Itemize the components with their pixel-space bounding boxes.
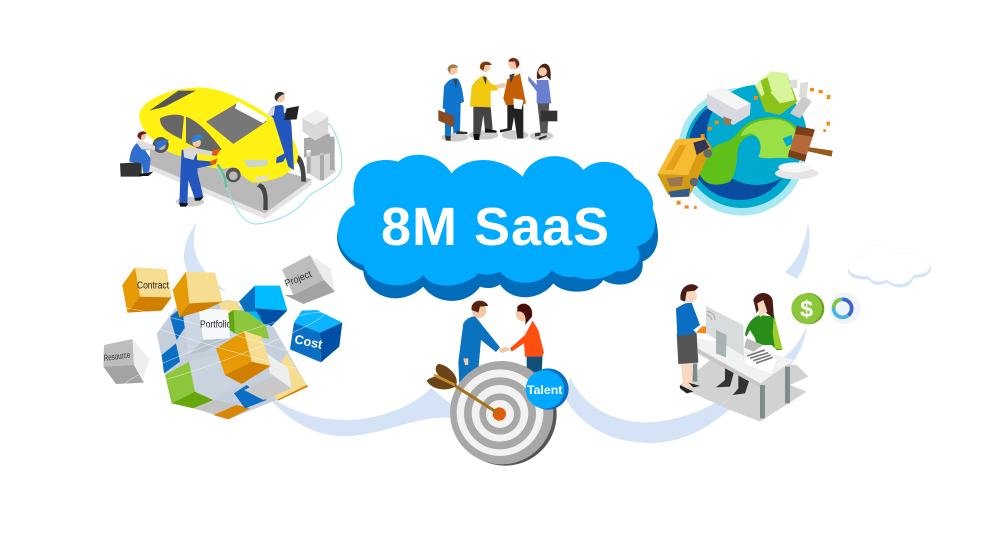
- cube: resource: Resource: [103, 350, 131, 363]
- orange cube top: [186, 272, 223, 303]
- cube: cost: Cost: [293, 332, 324, 352]
- cube: contract: Contract: [137, 280, 169, 291]
- small cloud: [848, 245, 931, 287]
- cloud face: [338, 155, 655, 286]
- arrow: [427, 364, 499, 414]
- icon: dollar: $: [800, 296, 813, 322]
- woman standing: [676, 284, 700, 393]
- seated woman: [716, 293, 783, 395]
- orange cube: [216, 331, 271, 384]
- cube: project: [282, 255, 335, 304]
- shadow: [678, 360, 808, 422]
- title: 8M SaaS: [381, 197, 610, 257]
- warehouse: [707, 87, 751, 125]
- illustration: office desk: [676, 284, 861, 428]
- illustration: car repair: [120, 87, 342, 224]
- worker with laptop: [268, 105, 294, 170]
- man in yellow: [473, 107, 493, 137]
- icon: donut: [829, 293, 861, 324]
- worker sitting: [120, 162, 142, 177]
- gavel: [775, 167, 818, 179]
- blue cube: [239, 286, 287, 326]
- cube: resource: [103, 339, 149, 384]
- woman: [537, 102, 549, 133]
- talent badge: Talent: [527, 383, 562, 397]
- icon: dollar: [791, 293, 824, 324]
- cube: contract: [122, 267, 172, 313]
- machine: [306, 145, 336, 182]
- land: [699, 117, 800, 185]
- car body: [139, 87, 298, 183]
- woman: [527, 353, 543, 373]
- cube: project: Project: [283, 269, 314, 290]
- talent badge: [526, 368, 569, 410]
- man in blue: [443, 78, 464, 136]
- illustration: handshake and target: [427, 301, 569, 466]
- worker standing: [176, 197, 204, 207]
- man: [458, 316, 500, 385]
- truck: [657, 137, 705, 175]
- green cube: [228, 310, 269, 338]
- cube cluster: [157, 300, 307, 419]
- man in orange: [500, 103, 523, 138]
- monitor: [706, 306, 763, 357]
- illustration: building blocks: [103, 255, 351, 419]
- cloud shadow: [337, 208, 658, 301]
- wifi: [707, 312, 715, 320]
- tablet: [696, 325, 718, 334]
- cable: [217, 123, 342, 224]
- orbit lines: [106, 299, 351, 396]
- illustration: globe logistics: [657, 72, 833, 216]
- desk: [693, 338, 794, 418]
- central cloud: [337, 155, 658, 301]
- target: [453, 362, 557, 466]
- shadows: [442, 133, 468, 142]
- cube: cost: [290, 310, 342, 362]
- platform: [150, 165, 312, 219]
- globe: [678, 88, 806, 216]
- connector swooshes: [184, 222, 810, 443]
- cube: portfolio: [183, 308, 232, 355]
- green building: [755, 72, 797, 115]
- orbit dashes: [677, 88, 830, 209]
- illustration: business people: [438, 58, 557, 142]
- cube: portfolio: Portfolio: [200, 320, 232, 331]
